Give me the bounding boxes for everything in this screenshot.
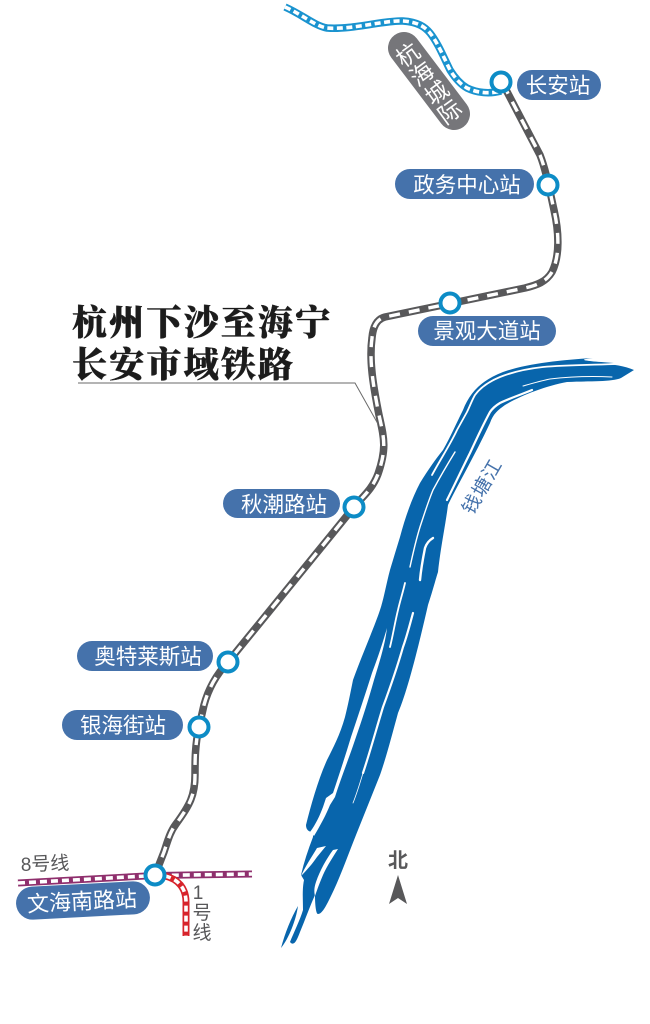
station: Outlets [77, 641, 238, 672]
station: Government Center: 政务中心站 [413, 174, 521, 198]
pill: Hangzhou-Haining intercity label: 际 [433, 95, 467, 129]
label: line 1: 1 [193, 883, 203, 904]
station: Wenhai South Road: 文海南路站 [26, 886, 138, 917]
label: line 1 [192, 883, 212, 944]
title [72, 304, 332, 385]
station: Wenhai South Road [15, 866, 164, 920]
label: Qiantang river: 钱塘江 [458, 455, 507, 518]
station: Landscape Avenue [418, 294, 556, 346]
station: Government Center [395, 169, 558, 199]
station: Chang'an: 长安站 [526, 74, 590, 98]
pill: Hangzhou-Haining intercity label: 海 [405, 57, 439, 91]
station: Landscape Avenue: 景观大道站 [433, 320, 541, 344]
pill: Hangzhou-Haining intercity label [391, 38, 467, 129]
pill: Hangzhou-Haining intercity label: 杭 [391, 38, 425, 72]
station: Yinhai Street [62, 710, 208, 740]
main railway route [155, 84, 558, 875]
river: Qiantang [281, 358, 634, 948]
title: 杭州下沙至海宁 [72, 304, 332, 343]
label: line 8: 8号线 [20, 852, 70, 876]
station: Outlets: 奥特莱斯站 [94, 645, 202, 669]
label: line 1: 号 [192, 903, 212, 924]
station: Chang'an [492, 70, 601, 100]
pill: Hangzhou-Haining intercity label: 城 [420, 76, 454, 110]
station: Qiuchao Road [223, 489, 364, 518]
title: 长安市域铁路 [72, 345, 295, 385]
leader line from title to route [78, 383, 378, 424]
line: metro line 8 [18, 874, 252, 883]
label: line 1: 线 [192, 922, 212, 944]
icon: north arrow [388, 849, 408, 904]
station: Qiuchao Road: 秋潮路站 [241, 493, 327, 517]
station: Yinhai Street: 银海街站 [80, 714, 166, 738]
line: Hangzhou-Haining intercity [285, 7, 501, 93]
icon: north arrow: 北 [388, 849, 408, 872]
line: metro line 1 [165, 876, 186, 936]
